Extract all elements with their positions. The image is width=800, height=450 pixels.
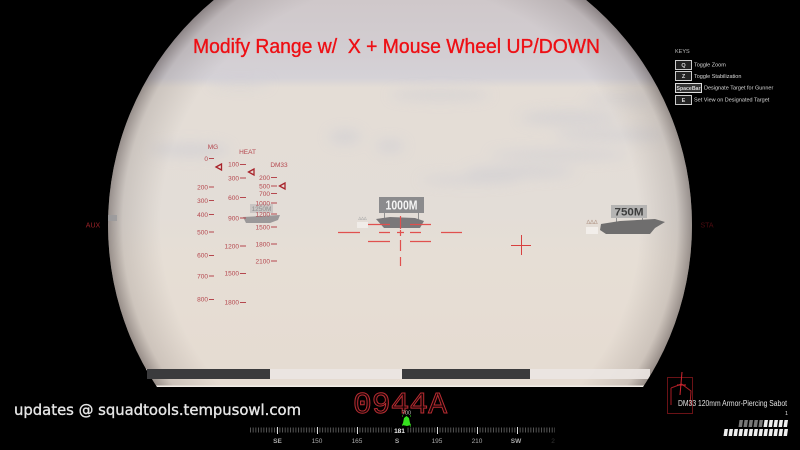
keys panel: [675, 49, 773, 104]
scope lens: [100, 0, 700, 390]
tank at 1000M: 1000M: [386, 198, 418, 212]
secondary crosshair: [511, 235, 531, 255]
vignette: [100, 0, 700, 390]
main reticle: [338, 216, 462, 266]
bottom lens edge: [156, 386, 644, 387]
range scale: HEAT: 100: [228, 162, 239, 168]
compass scale: 150: [312, 438, 323, 445]
compass marker: 700: [402, 410, 411, 416]
range scale: MG: 600: [197, 252, 208, 260]
compass scale: 195: [432, 438, 443, 445]
title: Modify Range w/ X + Mouse Wheel UP/DOWN: [193, 36, 600, 58]
range scale: DM33: 500: [259, 184, 270, 190]
tank at 1000M: ∆∆∆: [358, 216, 367, 221]
tank at 1250M: [243, 204, 280, 223]
compass scale: 2: [551, 438, 555, 445]
compass scale: 165: [352, 438, 363, 445]
range scale: DM33: 1500: [256, 224, 270, 232]
gunner sight view: STA: [700, 222, 714, 230]
tank at 750M: [586, 205, 665, 234]
range scale: DM33: DM33: [270, 162, 288, 169]
keys panel: E: [682, 98, 686, 104]
keys panel: Z: [682, 74, 686, 80]
range scale: DM33: 700: [259, 191, 270, 198]
range scale: MG: [197, 144, 222, 304]
range scale: HEAT: 1800: [225, 300, 239, 306]
range scale: HEAT: 300: [228, 176, 239, 182]
ammo name: DM33 120mm Armor-Piercing Sabot: [678, 399, 788, 408]
keys panel: Designate Target for Gunner: [704, 86, 773, 92]
tank at 750M: ∆∆∆: [586, 219, 598, 226]
range scale: DM33: 1000: [256, 200, 270, 208]
bottom dark bar: right: [402, 369, 530, 379]
range scale: HEAT: 900: [228, 216, 239, 222]
range scale: DM33: 1200: [256, 212, 270, 218]
range scale: MG: 400: [197, 212, 208, 219]
cloud patches: [166, 112, 640, 182]
compass scale: S: [395, 438, 400, 445]
far tank at left edge: [108, 215, 117, 221]
tank at 750M: 750M: [614, 206, 644, 218]
range scale: MG: 200: [197, 184, 208, 192]
range scale: HEAT: 600: [228, 195, 239, 202]
compass scale: 181: [394, 428, 405, 435]
range scale: DM33: 2100: [256, 258, 270, 266]
range scale: MG: 500: [197, 230, 208, 236]
range scale: MG: 800: [197, 296, 208, 304]
compass scale: [250, 426, 555, 445]
tank at 1250M: 1250M: [252, 206, 271, 213]
range scale: DM33: 1800: [256, 242, 270, 248]
side labels: AUX: [86, 222, 101, 230]
ammo rows: [724, 420, 788, 436]
keys panel: Toggle Zoom: [694, 62, 726, 68]
range scale: HEAT: HEAT: [239, 149, 256, 156]
keys panel: SpaceBar: [677, 86, 700, 92]
range scale: HEAT: 1500: [225, 270, 239, 278]
tank at 1000M: [357, 197, 424, 228]
compass scale: 210: [472, 438, 483, 445]
range scale: MG: 700: [197, 274, 208, 280]
range scale: HEAT: 1200: [225, 244, 239, 250]
range scale: MG: MG: [208, 144, 218, 151]
range scale: HEAT: [225, 149, 256, 306]
keys panel: KEYS: [675, 49, 690, 55]
compass scale: SW: [511, 438, 522, 445]
updates credit: updates @ squadtools.tempusowl.com: [14, 401, 301, 419]
compass marker: [402, 410, 411, 426]
range scale: DM33: 200: [259, 175, 270, 182]
keys panel: Q: [681, 63, 686, 69]
vehicle orientation icon: [668, 372, 692, 414]
keys panel: Set View on Designated Target: [694, 98, 770, 104]
bottom dark bar: left: [147, 369, 270, 379]
compass scale: SE: [273, 438, 282, 445]
keys panel: Toggle Stabilization: [694, 74, 741, 80]
ammo loaded count: 1: [785, 411, 788, 417]
range scale: DM33: [256, 162, 288, 266]
range display: 0944A: [353, 388, 447, 423]
bottom white strip: [140, 369, 650, 379]
range scale: MG: 0: [204, 156, 208, 163]
range scale: MG: 300: [197, 198, 208, 205]
